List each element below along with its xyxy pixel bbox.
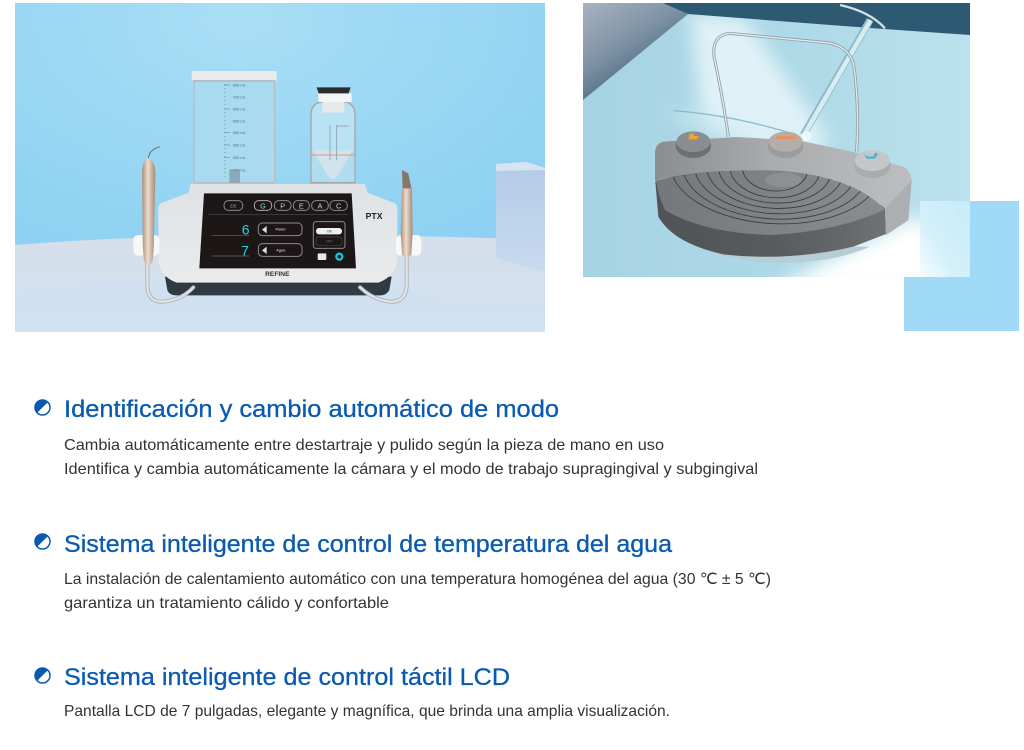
touch screen: C — [336, 201, 342, 210]
text block 2: garantiza un tratamiento cálido y confortable — [64, 595, 389, 612]
heading 2: Sistema inteligente de control de temperatura del agua — [64, 531, 673, 558]
pedal front — [655, 170, 886, 257]
water tank: 600 mL — [233, 118, 247, 123]
feature 3 — [35, 664, 670, 720]
handpiece left — [142, 147, 160, 265]
pedal shadow base — [697, 247, 870, 263]
touch screen: P — [280, 201, 285, 210]
touch screen — [199, 193, 356, 268]
touch screen: A — [318, 201, 323, 210]
touch screen: 6 — [242, 222, 250, 238]
wire handle — [714, 33, 858, 152]
light overlay square — [920, 201, 970, 277]
water tank: 200 mL — [233, 155, 247, 160]
text block 2 — [64, 571, 771, 612]
water tank: 100 mL — [233, 168, 247, 173]
water tank: 500 mL — [233, 106, 247, 111]
PTX logo: PTX — [366, 211, 383, 221]
touch screen: Agua — [276, 248, 286, 252]
touch screen: 7 — [241, 242, 249, 258]
text block 1: Identifica y cambia automáticamente la cámara y el modo de trabajo supragingival y subgingival — [64, 461, 758, 478]
device body — [158, 184, 397, 283]
text block 3: Pantalla LCD de 7 pulgadas, elegante y magnífica, que brinda una amplia visualización. — [64, 703, 670, 720]
water bottle — [310, 87, 356, 183]
icon: bullet 3 — [35, 668, 50, 683]
decorative accent square — [904, 201, 1019, 331]
handpiece right — [401, 170, 413, 257]
text block 1: Cambia automáticamente entre destartraje y pulido según la pieza de mano en uso — [64, 437, 664, 454]
icon: bullet 1 — [35, 400, 50, 415]
touch screen: Poder — [275, 228, 286, 232]
water tank: 400 mL — [233, 130, 247, 135]
tubing — [147, 257, 407, 302]
base — [165, 277, 392, 295]
icon: bullet 2 — [35, 534, 50, 549]
photo: ultrasonic unit — [15, 3, 545, 332]
touch screen: E — [299, 201, 304, 210]
touch screen: OFF — [326, 239, 333, 243]
water tank — [192, 71, 277, 183]
REFINE label: REFINE — [265, 271, 290, 278]
touch screen: ON — [327, 230, 332, 234]
tread — [656, 170, 885, 235]
touch screen: £/£ — [230, 203, 237, 208]
side holders — [133, 235, 159, 256]
cable — [802, 5, 885, 141]
light streaks — [675, 14, 920, 277]
water tank: 700 mL — [233, 95, 247, 100]
text block 2: La instalación de calentamiento automático con una temperatura homogénea del agua (30 ℃ ± 5 ℃) — [64, 571, 771, 588]
button center — [768, 132, 803, 158]
pedal top plate — [655, 137, 912, 235]
heading 3: Sistema inteligente de control táctil LCD — [64, 664, 510, 691]
wall corner — [583, 3, 688, 100]
dark backdrop — [663, 3, 970, 35]
water tank: 300 mL — [233, 143, 247, 148]
touch screen: G — [260, 201, 266, 210]
heading 1: Identificación y cambio automático de modo — [64, 396, 559, 423]
button left — [676, 131, 711, 158]
feature 1 — [35, 396, 758, 478]
button right — [854, 150, 891, 178]
water tank: 900 mL — [233, 83, 247, 88]
pedal side — [885, 180, 912, 235]
text block 1 — [64, 437, 758, 478]
photo: foot pedal — [583, 3, 985, 290]
feature 2 — [35, 531, 771, 612]
